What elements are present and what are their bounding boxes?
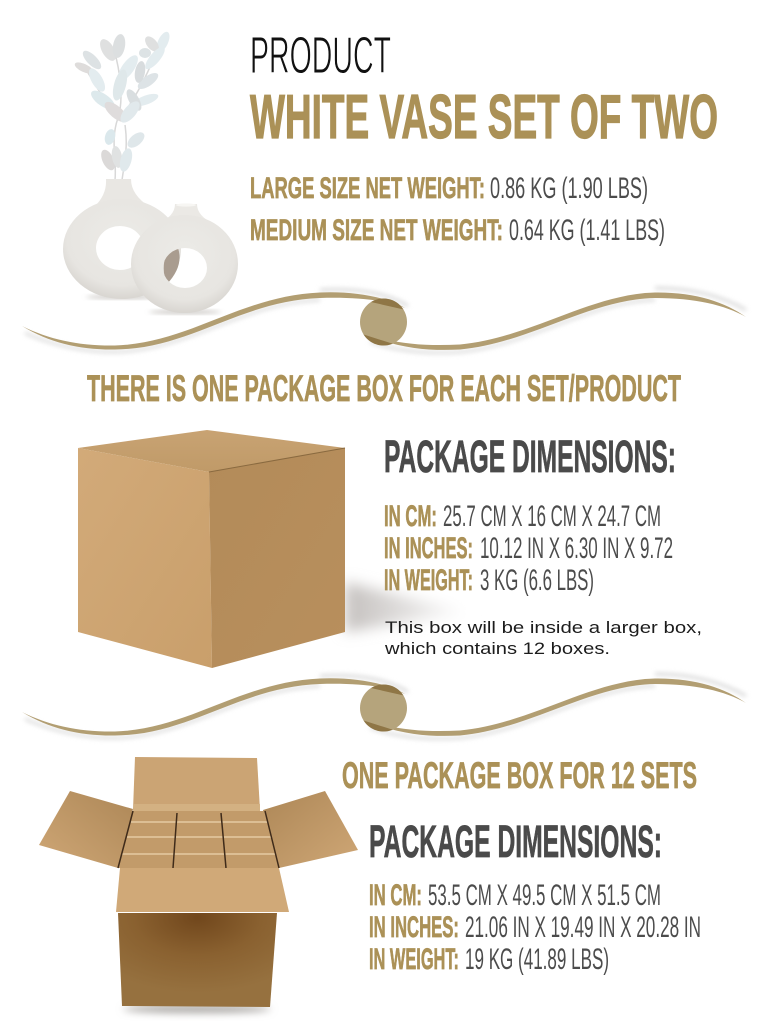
text: in inches: IN INCHES: — [384, 532, 473, 565]
text: in weight — [369, 943, 609, 976]
divider wave 1 — [22, 288, 746, 353]
text: in weight: 19 KG (41.89 LBS) — [465, 943, 609, 976]
note: larger box — [384, 619, 702, 658]
image: white vases with dried plant — [63, 30, 238, 314]
icon: small vase — [131, 203, 238, 314]
text: in cm: IN CM: — [384, 500, 437, 533]
text: in cm — [384, 500, 661, 533]
text: in weight: 3 KG (6.6 LBS) — [480, 564, 594, 597]
heading: product: PRODUCT — [250, 27, 391, 85]
icon: large vase — [63, 179, 181, 299]
note: larger box: which contains 12 boxes. — [384, 640, 610, 658]
note: larger box: This box will be inside a larger box, — [385, 619, 702, 637]
panel: package box for 12 sets — [39, 755, 701, 1013]
text: large size net weight: 0.86 KG (1.90 LBS) — [490, 172, 648, 205]
text: in inches — [384, 532, 673, 565]
panel: single package box — [78, 430, 702, 668]
image: open cardboard box with 12 boxes — [39, 757, 358, 1013]
panel: product — [63, 27, 718, 314]
text: medium size net weight: 0.64 KG (1.41 LBS) — [509, 214, 665, 247]
text: large size net weight: LARGE SIZE NET WEIGHT: — [250, 172, 485, 205]
text: in weight: IN WEIGHT: — [369, 943, 459, 976]
text: in inches: IN INCHES: — [369, 911, 459, 944]
image: closed cardboard box — [78, 430, 470, 668]
text: in inches — [369, 911, 701, 944]
text: in cm: IN CM: — [369, 879, 422, 912]
text: in cm — [369, 879, 661, 912]
divider wave 2 — [22, 674, 746, 739]
text: in weight: IN WEIGHT: — [384, 564, 473, 597]
icon: dried plant — [73, 30, 172, 180]
text: medium size net weight: MEDIUM SIZE NET WEIGHT: — [250, 214, 503, 247]
